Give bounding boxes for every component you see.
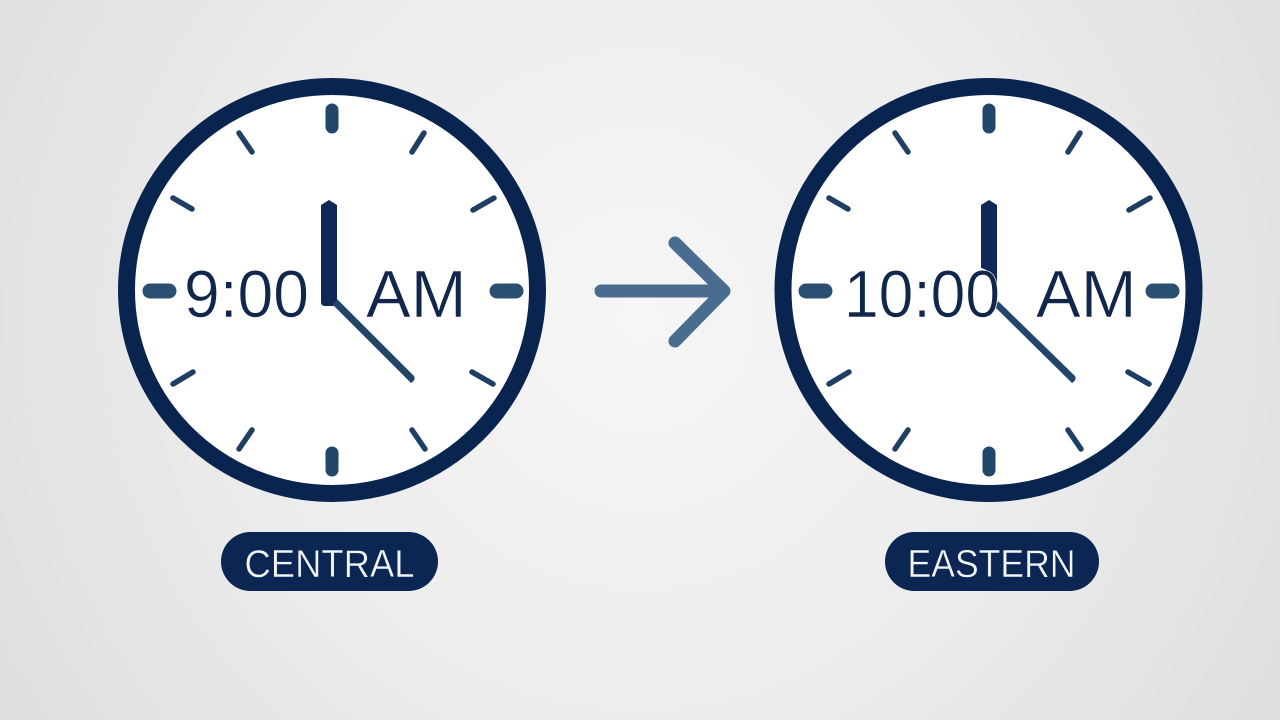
time text: 10:00 AM: AM bbox=[1036, 257, 1136, 332]
short hand: central bbox=[333, 299, 415, 383]
label: central: CENTRAL bbox=[244, 543, 414, 586]
short hand: eastern bbox=[996, 301, 1076, 383]
long hand: central bbox=[321, 200, 337, 306]
time text: 10:00 AM: 10:00 bbox=[844, 257, 1000, 332]
label: eastern: EASTERN bbox=[908, 543, 1076, 586]
hour ticks: eastern bbox=[806, 110, 1172, 470]
clock: eastern bbox=[783, 86, 1194, 494]
clock: central bbox=[126, 86, 538, 494]
time text: 9:00 AM: AM bbox=[366, 257, 466, 332]
clock face: central bbox=[126, 86, 538, 494]
arrow: central to eastern bbox=[601, 243, 724, 341]
label: eastern bbox=[885, 532, 1099, 591]
long hand: eastern bbox=[981, 200, 997, 302]
time text: 9:00 AM: 9:00 bbox=[184, 257, 309, 332]
label: central bbox=[221, 532, 438, 591]
hour ticks: central bbox=[150, 110, 516, 470]
clock face: eastern bbox=[783, 86, 1194, 494]
digit counter mask: eastern bbox=[965, 268, 995, 318]
